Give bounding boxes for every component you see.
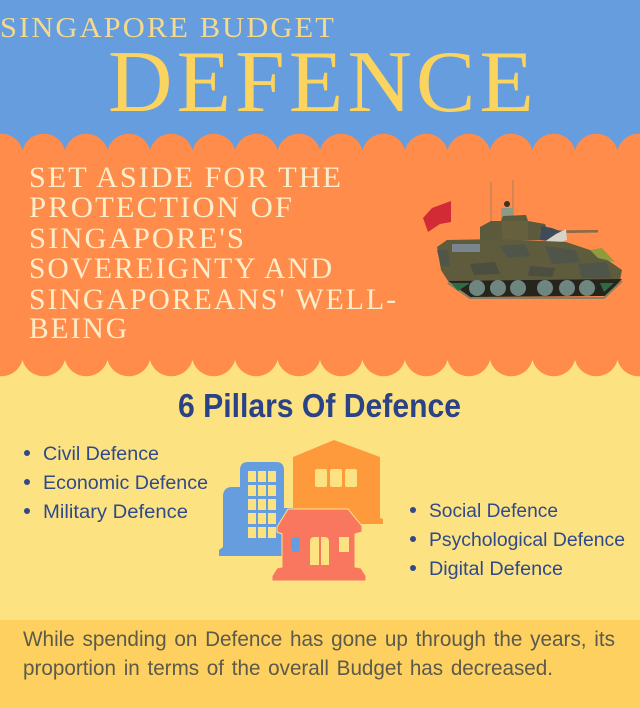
icon: tank with flag (423, 180, 622, 298)
text block: purpose of the budget: BEING (29, 312, 129, 345)
icon: buildings (219, 440, 383, 581)
text block: purpose of the budget: SET ASIDE FOR THE (29, 161, 343, 194)
text block: purpose of the budget: SINGAPOREANS' WELL- (29, 283, 398, 316)
list: left pillars: Economic Defence (43, 473, 208, 494)
list: left pillars: Civil Defence (43, 444, 159, 465)
title: Defence: DEFENCE (108, 34, 538, 131)
heading: Singapore Budget: SINGAPORE BUDGET (0, 12, 336, 44)
flag (423, 201, 451, 232)
turret (480, 215, 552, 240)
list: left pillars: Military Defence (43, 502, 188, 523)
text block: spending note: While spending on Defence has gone up through the years, its (23, 628, 615, 651)
orange building (293, 440, 383, 524)
tracks and road wheels (448, 279, 622, 298)
panel: closing statement (0, 620, 640, 708)
blue tower (219, 462, 300, 556)
text block: purpose of the budget: SOVEREIGNTY AND (29, 252, 334, 285)
heading: 6 Pillars Of Defence: 6 Pillars Of Defence (178, 387, 461, 424)
text block: purpose of the budget: PROTECTION OF (29, 191, 294, 224)
list: right pillars: Digital Defence (429, 559, 563, 580)
text block: spending note (23, 628, 615, 680)
panel: header (0, 0, 640, 155)
text block: spending note: proportion in terms of the overall Budget has decreased. (23, 657, 553, 680)
list: left pillars (24, 444, 208, 523)
list: right pillars (410, 501, 625, 580)
red house (272, 509, 366, 581)
text block: purpose of the budget: SINGAPORE'S (29, 222, 246, 255)
list: right pillars: Psychological Defence (429, 530, 625, 551)
panel: orange scalloped band (0, 134, 640, 376)
text block: purpose of the budget (29, 161, 398, 345)
list: right pillars: Social Defence (429, 501, 558, 522)
soldier (501, 201, 513, 221)
hull (437, 239, 622, 281)
